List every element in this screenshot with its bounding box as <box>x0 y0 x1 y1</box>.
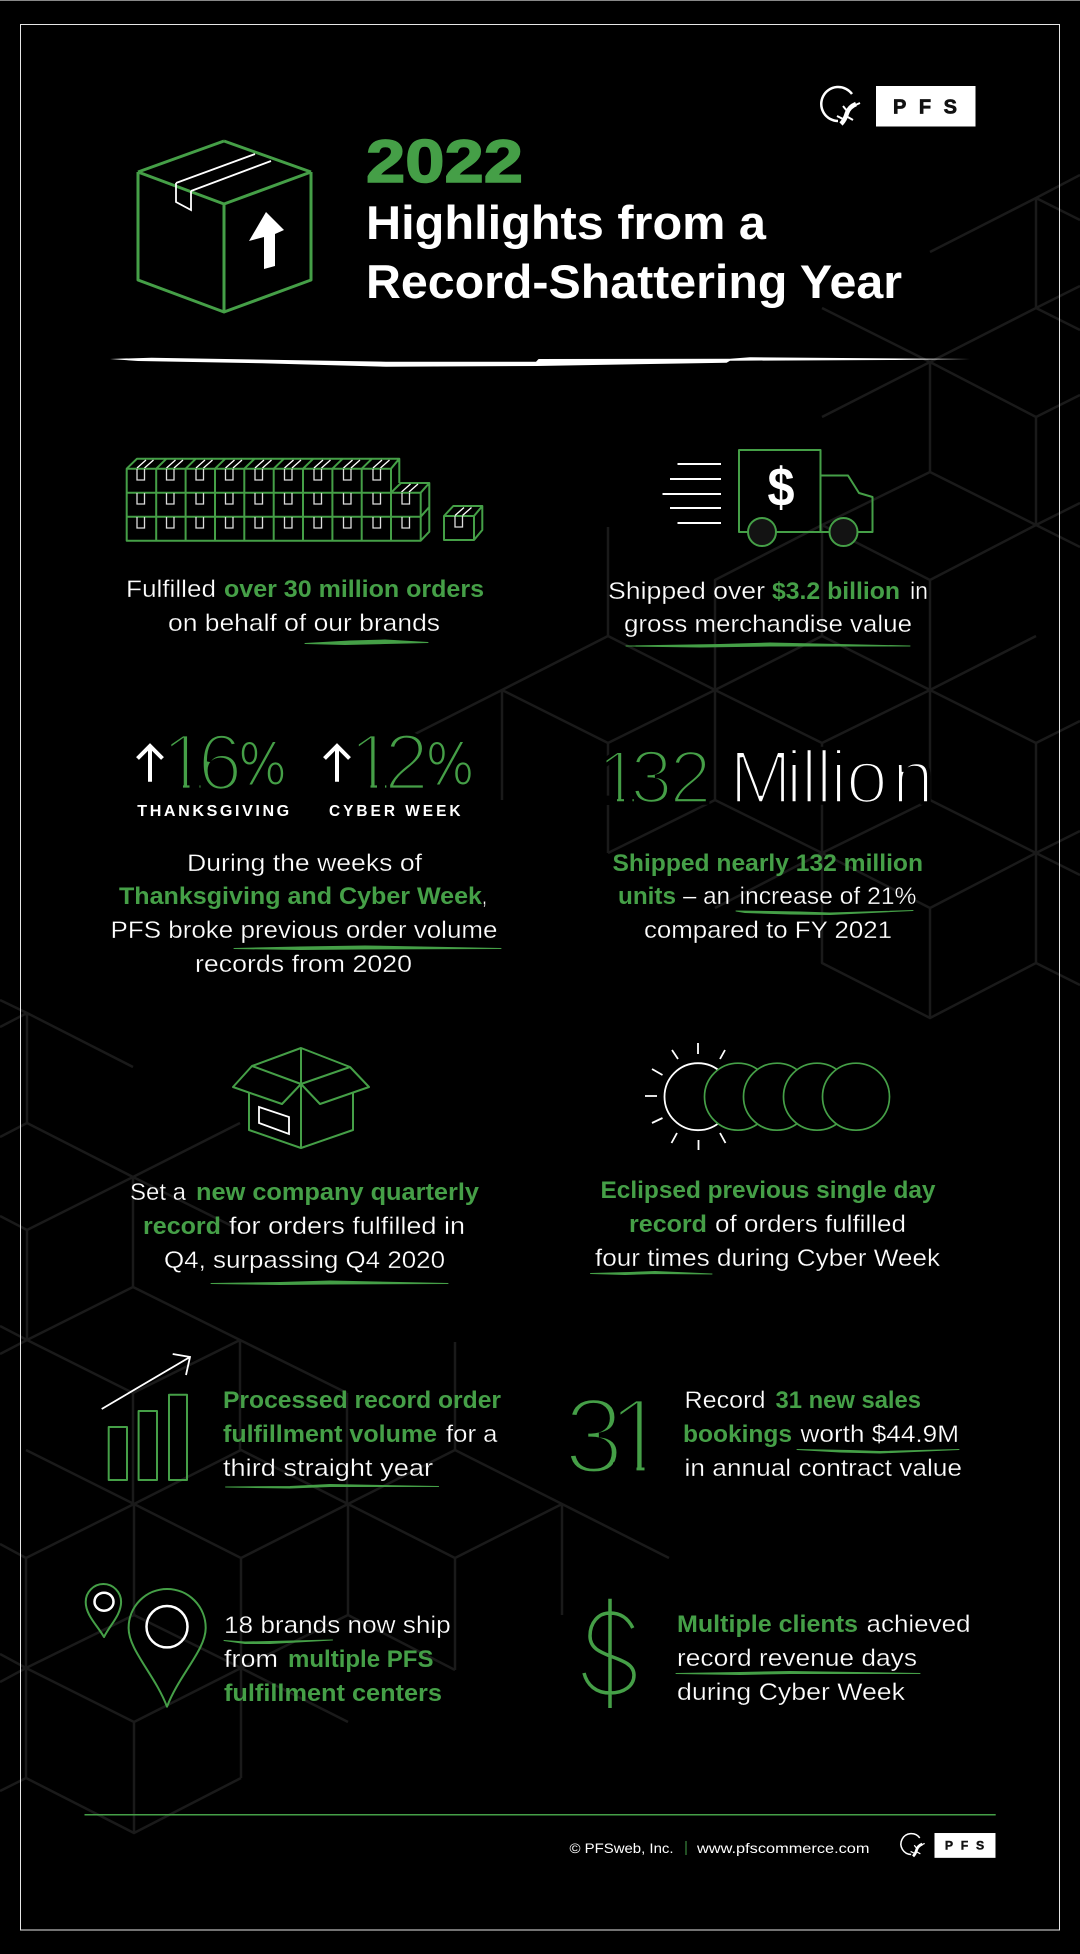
stat: 12% <box>349 717 474 806</box>
text: 18 brands: fulfillment centers <box>224 1680 442 1707</box>
text: multiple clients: Multiple clients <box>677 1611 858 1638</box>
text: multiple clients: during Cyber Week <box>677 1679 906 1706</box>
icon: eclipsing sun <box>645 1043 890 1150</box>
text: 18 brands <box>224 1612 451 1707</box>
text: copyright <box>570 1840 870 1856</box>
stat: 12%: 12 <box>349 717 429 806</box>
panel: 132 million units <box>598 735 934 944</box>
text: new company quarterly record: Set a <box>130 1179 187 1206</box>
text: third straight year: for a <box>446 1421 498 1448</box>
text: new company quarterly record: Q4, surpassing Q4 2020 <box>164 1247 445 1274</box>
text: new company quarterly record <box>130 1179 480 1284</box>
text: units shipped <box>612 850 923 944</box>
panel: 30 million orders <box>126 459 484 644</box>
text: new company quarterly record: record <box>143 1213 221 1240</box>
text: gross merchandise value: Shipped over <box>608 578 765 605</box>
panel: 31 sales bookings <box>564 1375 962 1496</box>
text: sales bookings: 31 new sales <box>776 1387 921 1414</box>
icon: shipping box with up arrow <box>138 141 311 312</box>
text: new company quarterly record: new company quarterly <box>196 1179 480 1206</box>
text: sales bookings: worth $44.9M <box>799 1421 959 1448</box>
text: sales bookings <box>683 1387 962 1482</box>
text: third straight year: Processed record order <box>223 1387 501 1414</box>
text: orders: Fulfilled <box>126 576 216 603</box>
icon: up arrow <box>324 745 350 782</box>
text: orders: on behalf of our brands <box>168 610 440 637</box>
title <box>366 128 902 308</box>
logo: PFS footer <box>901 1833 995 1858</box>
panel: single day record <box>590 1043 941 1274</box>
label: Thanksgiving: THANKSGIVING <box>137 803 292 820</box>
stat: 16% <box>162 717 287 806</box>
text: order volume records: During the weeks of <box>187 850 422 877</box>
text: eclipsed record: record <box>629 1211 707 1238</box>
text: copyright: © PFSweb, Inc. <box>570 1840 674 1856</box>
icon: dollar sign <box>584 1599 634 1708</box>
panel: fulfillment volume <box>102 1354 501 1488</box>
text: eclipsed record: Eclipsed previous single day <box>600 1177 936 1204</box>
icon: delivery truck with dollar sign <box>662 450 872 546</box>
icon: delivery truck with dollar sign: $ <box>768 456 794 518</box>
text: third straight year: third straight year <box>223 1455 433 1482</box>
text: multiple clients: achieved <box>866 1611 970 1638</box>
text: sales bookings: in annual contract value <box>684 1455 962 1482</box>
icon: stack of boxes <box>127 459 482 541</box>
icon: map pins <box>86 1584 206 1707</box>
icon: open box <box>233 1048 369 1148</box>
text: 18 brands: multiple PFS <box>288 1646 434 1673</box>
text: order volume records: , <box>482 883 487 910</box>
text: order volume records: PFS broke previous order volume <box>110 917 498 944</box>
text: gross merchandise value: in <box>910 578 928 605</box>
icon: gecko ring <box>821 87 860 124</box>
text: gross merchandise value: $3.2 billion <box>772 578 900 605</box>
text: 18 brands: from <box>224 1646 278 1673</box>
stat: 132 Million <box>598 735 934 819</box>
text: order volume records <box>110 850 501 978</box>
stat: 12%: % <box>426 732 474 797</box>
panel: quarterly record <box>130 1048 480 1284</box>
text: units shipped: increase of 21% <box>740 883 916 910</box>
title: 2022 <box>366 128 523 195</box>
title: Highlights from a <box>366 196 767 249</box>
icon: up arrow <box>138 745 162 782</box>
text: sales bookings: Record <box>684 1387 766 1414</box>
stat: 16%: % <box>238 732 287 797</box>
text: orders <box>126 576 484 644</box>
text: orders: over 30 million orders <box>224 576 484 603</box>
divider: white brush stroke <box>110 357 970 367</box>
stat: 31: 31 <box>564 1375 668 1496</box>
panel: Thanksgiving and Cyber Week growth <box>110 717 501 978</box>
title: Record-Shattering Year <box>366 255 902 308</box>
text: gross merchandise value <box>608 578 928 647</box>
panel: 3.2 billion GMV <box>608 450 928 647</box>
logo: PFS header: PFS <box>893 96 957 118</box>
footer <box>84 1814 996 1858</box>
stat: 132 Million: 132 <box>598 735 711 819</box>
text: third straight year <box>223 1387 501 1488</box>
text: copyright: www.pfscommerce.com <box>696 1840 870 1856</box>
stat: 16%: 16 <box>162 717 242 806</box>
text: gross merchandise value: gross merchandise value <box>624 611 912 638</box>
label: Cyber Week: CYBER WEEK <box>329 803 464 820</box>
text: multiple clients <box>676 1611 970 1706</box>
text: units shipped: compared to FY 2021 <box>644 917 892 944</box>
text: third straight year: fulfillment volume <box>223 1421 437 1448</box>
text: units shipped: Shipped nearly 132 million <box>612 850 923 877</box>
panel: record revenue days <box>584 1599 970 1708</box>
icon: rising bar chart with arrow <box>102 1354 190 1480</box>
text: new company quarterly record: for orders fulfilled in <box>229 1213 465 1240</box>
panel: multiple fulfillment centers <box>86 1584 451 1707</box>
text: order volume records: records from 2020 <box>195 951 412 978</box>
text: eclipsed record: four times during Cyber Week <box>595 1245 941 1272</box>
stat: 132 Million: Million <box>729 735 934 819</box>
logo: PFS header <box>821 86 976 126</box>
text: 18 brands: 18 brands now ship <box>224 1612 451 1639</box>
text: multiple clients: record revenue days <box>677 1645 917 1672</box>
text: sales bookings: bookings <box>683 1421 792 1448</box>
text: order volume records: Thanksgiving and Cyber Week <box>119 883 483 910</box>
logo: PFS footer: PFS <box>945 1839 984 1853</box>
text: eclipsed record <box>590 1177 941 1274</box>
text: units shipped: units <box>618 883 676 910</box>
text: eclipsed record: of orders fulfilled <box>715 1211 906 1238</box>
text: units shipped: – an <box>683 883 730 910</box>
